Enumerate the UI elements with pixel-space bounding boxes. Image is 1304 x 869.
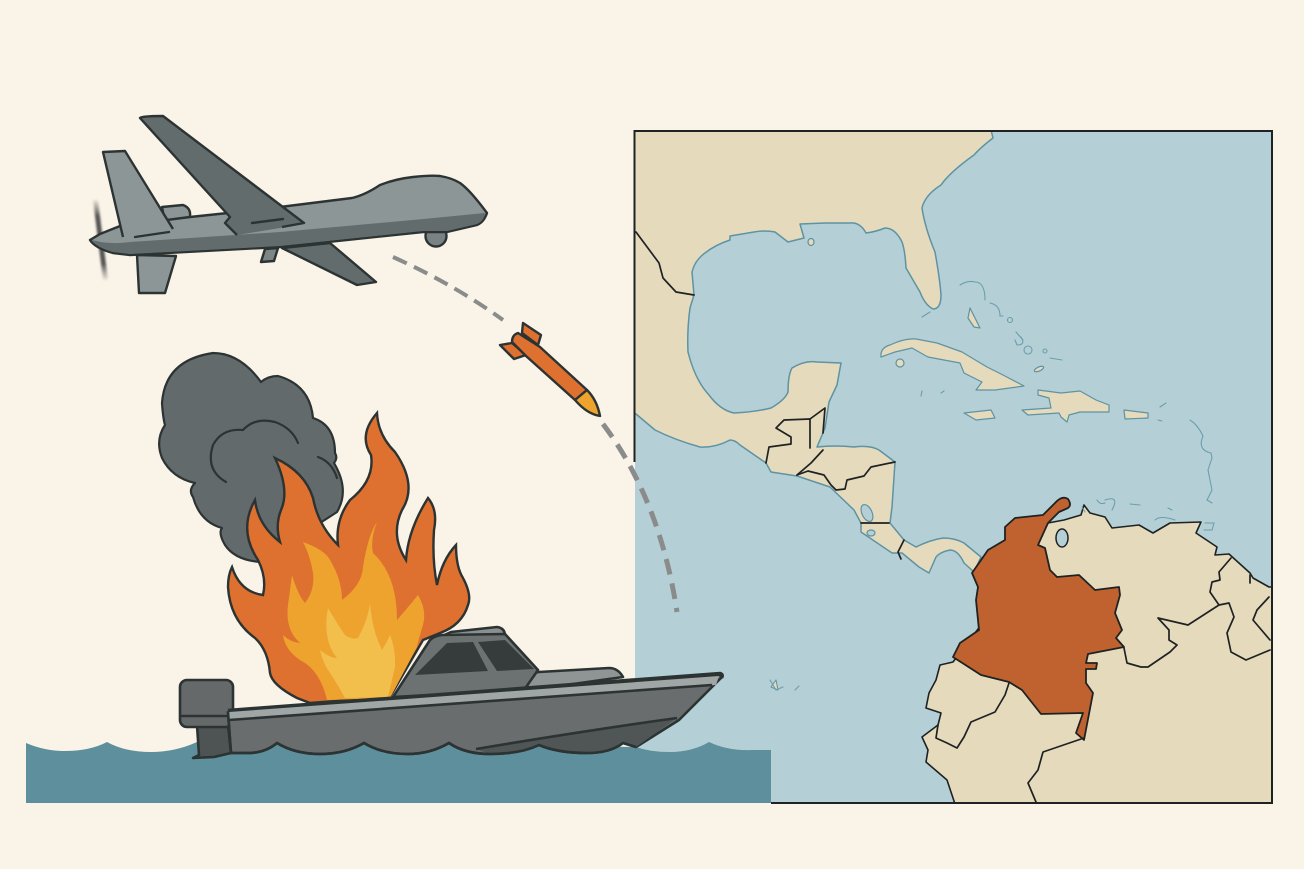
water <box>26 742 771 803</box>
wheel <box>426 226 446 246</box>
land: South America <box>922 505 1280 810</box>
small belly fin <box>261 248 278 262</box>
fuselage <box>90 176 487 255</box>
cabin <box>393 627 623 697</box>
dashed flight path <box>393 257 677 612</box>
flame: outer orange <box>228 413 469 703</box>
smoke cloud <box>159 353 343 562</box>
hull keel shadow <box>476 718 677 754</box>
flame: middle <box>283 522 424 700</box>
missile nose <box>575 390 600 416</box>
map border <box>634 131 1272 803</box>
Bahamas and Lesser Antilles outlines <box>770 281 1214 690</box>
missile <box>500 323 600 416</box>
hull <box>228 675 722 754</box>
lake Maracaibo <box>1056 529 1068 547</box>
lower wing <box>282 243 376 285</box>
country: Colombia <box>953 498 1124 740</box>
panel: map <box>630 130 1280 810</box>
flame: inner yellow <box>320 603 395 698</box>
deck rail <box>229 676 719 720</box>
engine intake <box>162 205 190 222</box>
outboard motor <box>180 680 233 758</box>
lower tail fin <box>137 255 176 293</box>
missile body <box>512 333 587 400</box>
fuselage belly shade <box>92 213 485 254</box>
Central American lakes <box>859 503 875 536</box>
main wing <box>140 116 304 235</box>
flames <box>228 413 469 703</box>
propeller <box>93 200 108 280</box>
land: Mississippi delta island <box>808 238 814 246</box>
land: Caribbean islands <box>771 308 1148 690</box>
wing and tail marks <box>135 219 283 237</box>
drone <box>90 116 487 293</box>
smoke inner curls <box>211 421 337 482</box>
vertical tail <box>103 151 173 237</box>
land: North and Central America <box>630 130 993 573</box>
country borders <box>636 232 1270 802</box>
missile fins <box>522 323 541 345</box>
boat <box>180 627 723 758</box>
cabin windows <box>415 642 488 675</box>
illustration <box>26 114 1273 804</box>
